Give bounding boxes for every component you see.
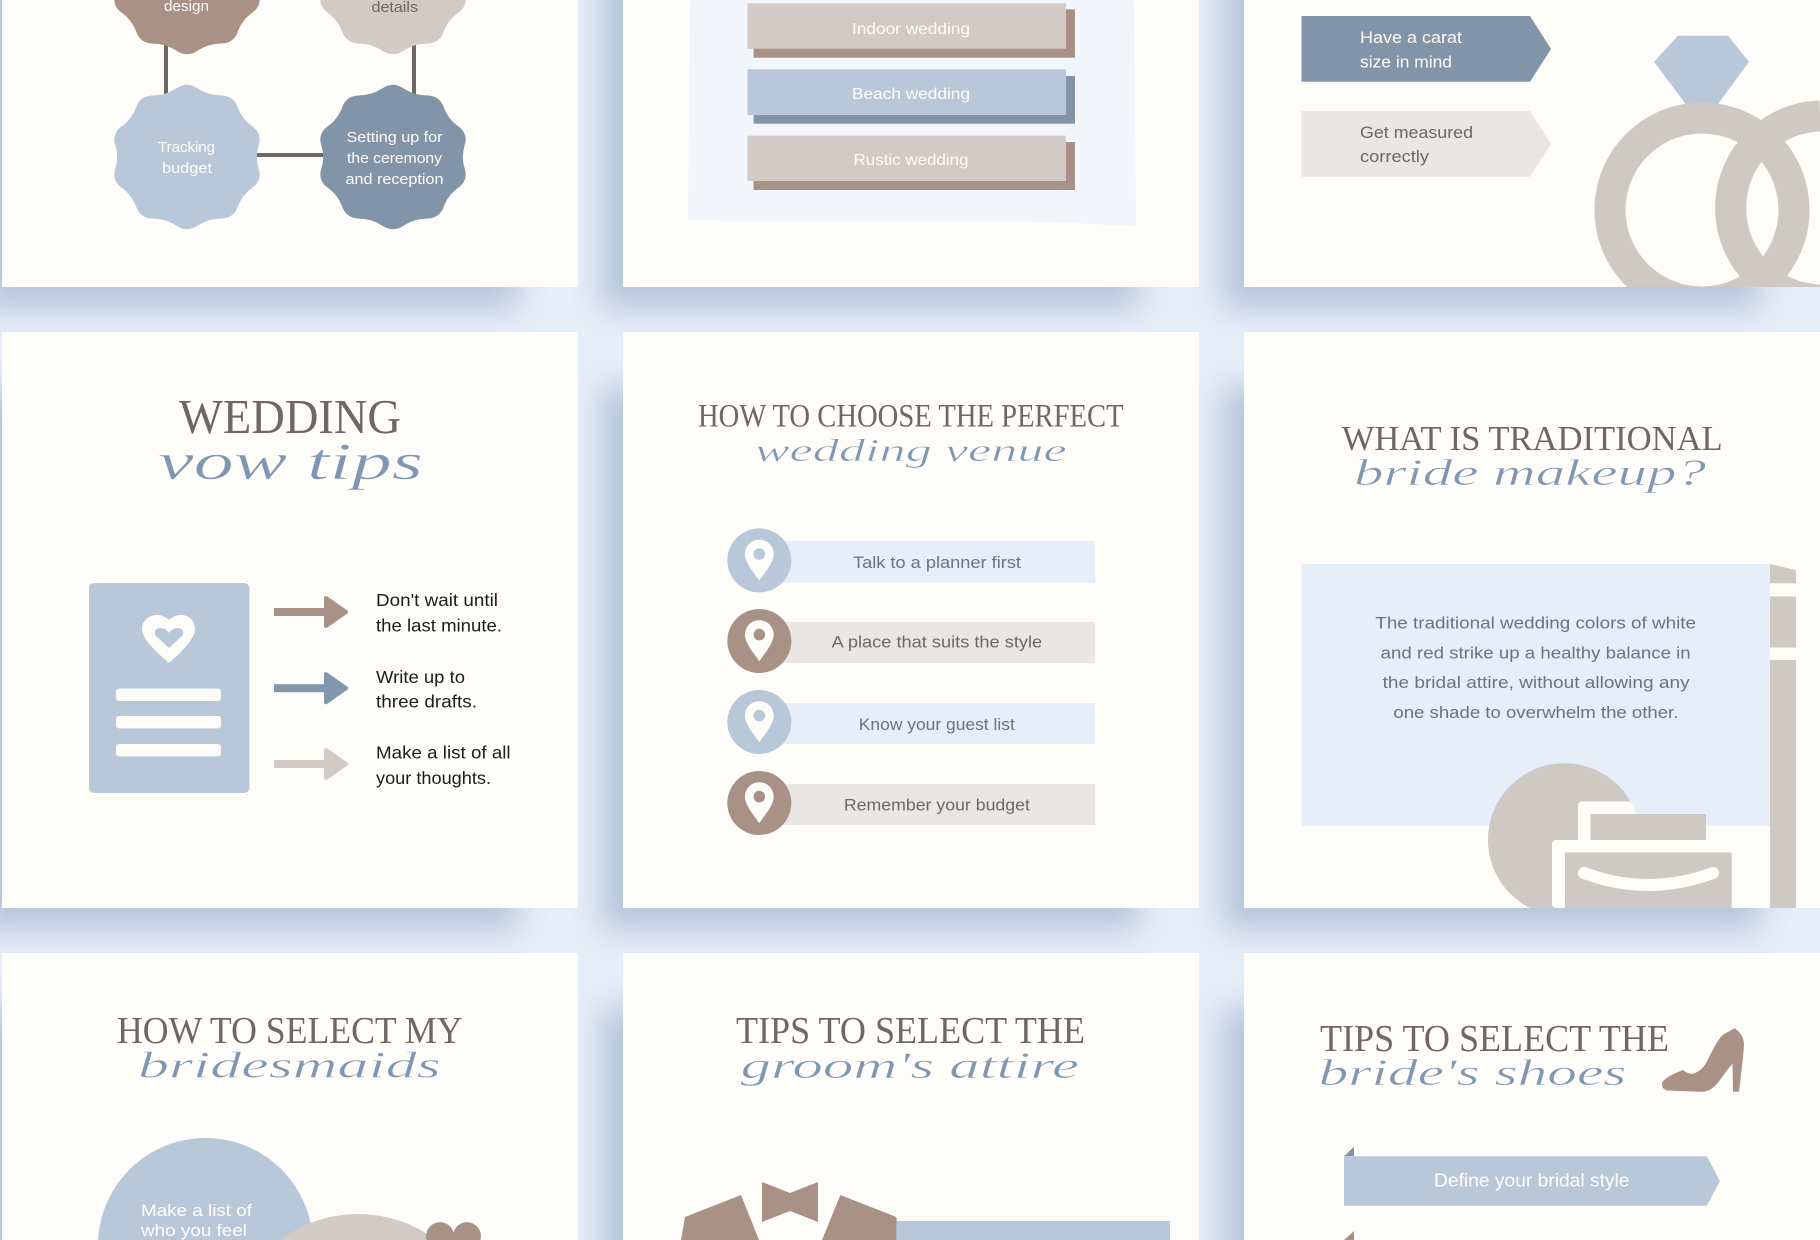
icon: tuxedo with bow tie xyxy=(681,1182,899,1240)
icon: mascara tube xyxy=(1770,564,1796,908)
tip text: Make a list of all xyxy=(376,743,511,763)
panel: choosing the venue xyxy=(623,332,1199,908)
button: beach wedding xyxy=(747,69,1075,124)
node: tracking budget xyxy=(114,85,260,229)
connector lines xyxy=(164,40,416,157)
heading: TIPS TO SELECT THE xyxy=(1320,1018,1669,1060)
tag: get measured xyxy=(1302,111,1551,177)
text box: The traditional wedding colors of white xyxy=(1375,614,1696,632)
script subheading: bride makeup? xyxy=(1354,453,1707,494)
banner: define your bridal style: Define your bridal style xyxy=(1434,1171,1630,1191)
text box xyxy=(1302,564,1770,826)
icon: heart xyxy=(426,1222,481,1240)
node: design xyxy=(114,0,260,54)
panel: ring tips xyxy=(1244,0,1820,302)
bubble: make a list: Make a list of xyxy=(141,1201,252,1220)
node: tracking budget: budget xyxy=(162,160,213,177)
panel: bride's shoes xyxy=(1244,953,1820,1240)
script subheading: wedding venue xyxy=(755,432,1067,468)
text box: one shade to overwhelm the other. xyxy=(1393,703,1678,722)
row: guest list xyxy=(727,690,1095,754)
row: budget xyxy=(727,771,1095,835)
tip text: Don't wait until xyxy=(376,590,498,610)
button: indoor wedding xyxy=(747,3,1075,58)
script subheading: bride's shoes xyxy=(1319,1053,1626,1094)
text box: the bridal attire, without allowing any xyxy=(1383,673,1690,692)
tag: carat size: size in mind xyxy=(1360,54,1452,72)
heading: HOW TO CHOOSE THE PERFECT xyxy=(698,398,1124,434)
panel: wedding planning flow xyxy=(2,0,578,287)
row: talk to a planner xyxy=(727,528,1095,592)
icon: cream jar with compact xyxy=(1488,763,1732,916)
arrow: beige xyxy=(274,750,346,778)
arrow: blue xyxy=(274,674,346,702)
arrow: brown xyxy=(274,598,346,626)
panel: groom's attire xyxy=(623,953,1199,1240)
text box: and red strike up a healthy balance in xyxy=(1381,643,1691,662)
node: setting up xyxy=(320,85,466,229)
banner fold: next item xyxy=(1344,1231,1354,1240)
tip text: your thoughts. xyxy=(376,768,491,788)
bubble: make a list xyxy=(98,1138,313,1240)
panel: wedding vow tips xyxy=(2,332,578,908)
icon: diamond rings xyxy=(1610,36,1820,302)
tag: carat size: Have a carat xyxy=(1360,29,1462,47)
node: tracking budget: Tracking xyxy=(158,139,215,156)
row: budget: Remember your budget xyxy=(844,797,1030,815)
button: beach wedding: Beach wedding xyxy=(852,86,970,103)
tag: carat size xyxy=(1302,16,1551,82)
tag: get measured: correctly xyxy=(1360,148,1430,166)
script subheading: bridesmaids xyxy=(138,1046,441,1087)
heading: WHAT IS TRADITIONAL xyxy=(1342,419,1723,458)
script subheading: vow tips xyxy=(158,434,423,491)
button: rustic wedding xyxy=(747,136,1075,190)
script subheading: groom's attire xyxy=(740,1046,1079,1087)
pale backdrop xyxy=(688,0,1136,226)
panel: selecting bridesmaids xyxy=(2,953,578,1240)
node: setting up: and reception xyxy=(346,171,444,188)
heading: HOW TO SELECT MY xyxy=(117,1010,462,1052)
row: guest list: Know your guest list xyxy=(859,716,1015,734)
row: suits the style: A place that suits the style xyxy=(832,634,1042,652)
bubble: make a list: who you feel xyxy=(140,1221,247,1240)
tip text: three drafts. xyxy=(376,692,477,712)
banner: define your bridal style xyxy=(1344,1147,1720,1206)
panel: wedding types xyxy=(623,0,1199,287)
tip text: the last minute. xyxy=(376,616,502,636)
heading: TIPS TO SELECT THE xyxy=(736,1010,1085,1052)
beige hill xyxy=(280,1214,436,1240)
row: suits the style xyxy=(727,609,1095,673)
tip text xyxy=(376,590,511,788)
tag: get measured: Get measured xyxy=(1360,124,1473,142)
button: rustic wedding: Rustic wedding xyxy=(854,152,968,169)
node: setting up: the ceremony xyxy=(347,150,443,167)
icon: vow card xyxy=(89,583,249,793)
node: details xyxy=(320,0,466,54)
button: indoor wedding: Indoor wedding xyxy=(852,21,970,38)
panel: traditional bride makeup xyxy=(1244,332,1820,916)
icon: high heel shoe xyxy=(1662,1028,1744,1092)
node: setting up: Setting up for xyxy=(346,129,442,146)
row: talk to a planner: Talk to a planner first xyxy=(853,554,1021,572)
heading: WEDDING xyxy=(179,389,401,444)
blue tip bar xyxy=(896,1221,1170,1240)
tip text: Write up to xyxy=(376,667,465,687)
